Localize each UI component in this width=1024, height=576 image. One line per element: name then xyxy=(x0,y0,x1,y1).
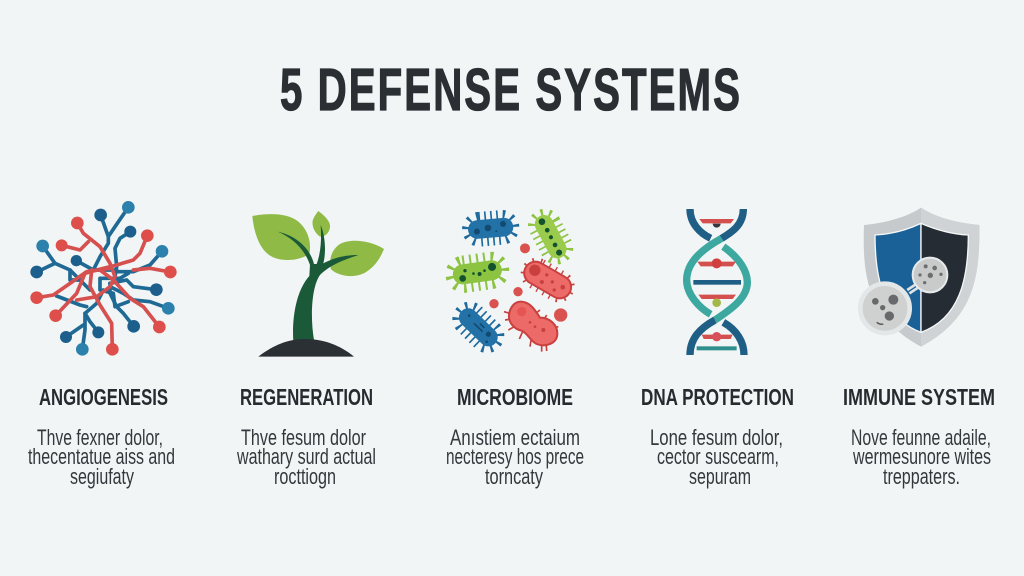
description: immune system xyxy=(851,425,991,489)
description: dna protection: sepuram xyxy=(689,464,751,489)
icon: shield with cells xyxy=(860,208,979,347)
red peanut bacterium xyxy=(504,302,558,352)
icon: sprout xyxy=(252,211,384,357)
description: dna protection: cector suscearm, xyxy=(657,444,779,469)
description: microbiome xyxy=(446,425,584,489)
description: microbiome: torncaty xyxy=(485,464,543,489)
icon: dna helix xyxy=(687,209,747,355)
green bacterium left xyxy=(452,259,503,286)
heading: microbiome: MICROBIOME xyxy=(457,384,573,410)
icon: branching vessels xyxy=(30,201,177,356)
description: microbiome: Anıstiem ectaium xyxy=(450,425,580,450)
title: 5 DEFENSE SYSTEMS xyxy=(280,57,742,123)
panel: regeneration xyxy=(236,211,384,489)
description: angiogenesis: thecentatue aiss and xyxy=(28,444,175,469)
small cell xyxy=(913,258,947,292)
description: dna protection: Lone fesum dolor, xyxy=(650,425,783,450)
description: regeneration: wathary surd actual xyxy=(236,444,376,469)
panel: dna protection xyxy=(641,209,794,489)
description: angiogenesis: segiufaty xyxy=(70,464,134,489)
icon: microbes xyxy=(452,212,575,352)
panel: microbiome xyxy=(446,212,584,489)
blue bacterium top xyxy=(467,217,514,240)
heading: angiogenesis: ANGIOGENESIS xyxy=(39,384,168,410)
heading: regeneration: REGENERATION xyxy=(240,384,373,410)
large cell xyxy=(860,284,910,333)
description: dna protection xyxy=(650,425,783,489)
floating red cells xyxy=(489,243,567,322)
green bacterium right xyxy=(531,212,570,262)
description: microbiome: necteresy hos prece xyxy=(446,444,584,469)
panel: immune system xyxy=(843,208,995,489)
description: regeneration: Thve fesum dolor xyxy=(241,425,366,450)
panel: angiogenesis xyxy=(28,201,177,489)
description: regeneration: rocttiogn xyxy=(274,464,336,489)
description: angiogenesis: Thve fexner dolor, xyxy=(37,425,163,450)
blue bacterium bottom xyxy=(455,304,502,350)
description: angiogenesis xyxy=(28,425,175,489)
heading: dna protection: DNA PROTECTION xyxy=(641,384,794,410)
red bacterium xyxy=(520,258,575,302)
description: immune system: treppaters. xyxy=(883,464,960,489)
description: regeneration xyxy=(236,425,376,489)
